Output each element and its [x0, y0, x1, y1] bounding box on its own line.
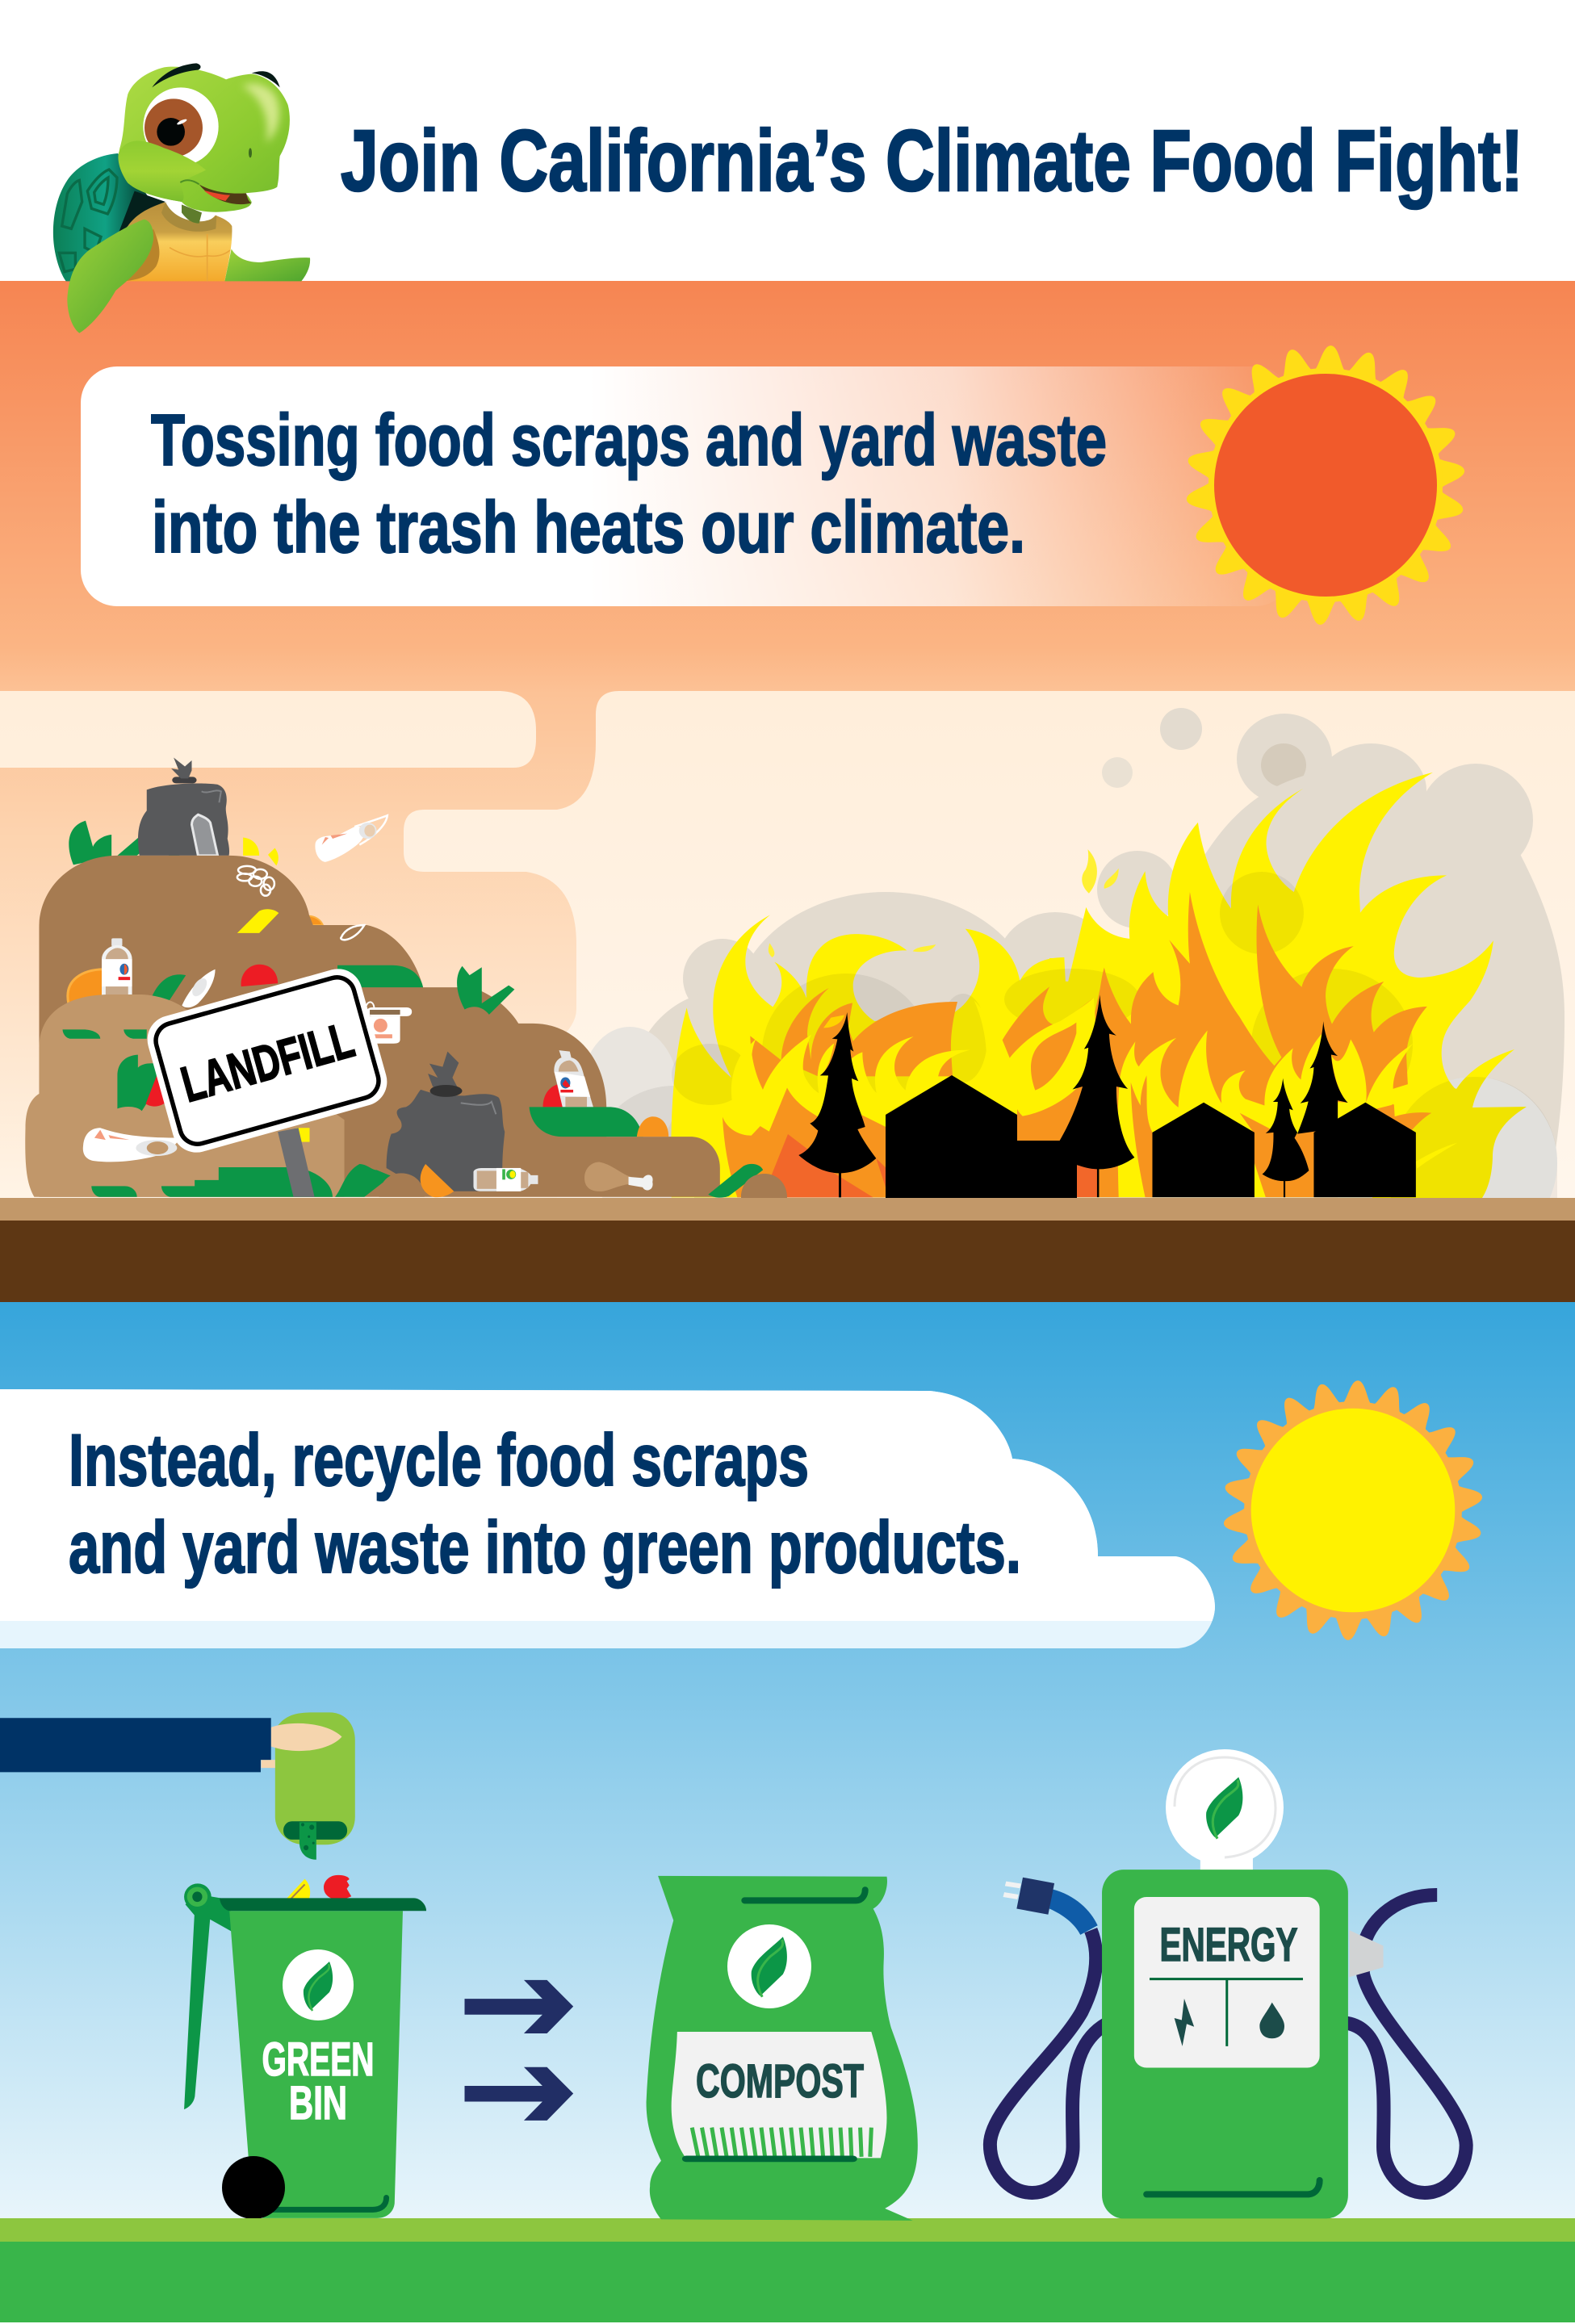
back leaves on landfill	[69, 821, 179, 865]
green leaf scrap	[151, 974, 186, 1001]
landfill sign	[142, 963, 392, 1158]
back yellow scraps	[243, 838, 279, 865]
orange fruit slice	[68, 969, 105, 1003]
takeout cup	[366, 1002, 412, 1044]
green bin	[184, 1875, 426, 2219]
cloud callout: recycle: Instead, recycle food scraps	[69, 1420, 809, 1501]
chicken drumstick	[584, 1162, 653, 1191]
bin wheel	[222, 2156, 285, 2219]
right edge tan mound	[741, 1174, 787, 1198]
flying food wrapper	[315, 815, 387, 862]
red apple in front hill	[146, 1074, 169, 1107]
front yellow flames	[723, 998, 1457, 1197]
plug	[1003, 1878, 1098, 1935]
white food wrapper	[83, 1128, 181, 1162]
plastic bottle left	[102, 938, 132, 995]
rear food scraps	[295, 916, 323, 925]
green bin: BIN	[289, 2077, 347, 2129]
lawn strip	[0, 2218, 1575, 2322]
red-orange flame base	[772, 1134, 1097, 1197]
tan mound	[379, 1173, 425, 1197]
red apple and bottle right	[543, 1050, 593, 1107]
landfill sign: LANDFILL	[175, 1012, 360, 1113]
bottom scraps at fire edge	[708, 1164, 763, 1198]
burning houses	[886, 1075, 1416, 1198]
hose holder	[1349, 1930, 1384, 1977]
callout: tossing food scraps: Tossing food scraps and yard waste	[151, 400, 1107, 481]
orange flame details	[1031, 1023, 1431, 1197]
trash bag lower	[387, 1052, 505, 1191]
icon: bright yellow sun	[1222, 1380, 1484, 1641]
compost bag	[647, 1876, 918, 2221]
green waste patch	[337, 965, 423, 987]
bin body	[229, 1911, 403, 2218]
clean sky panel background	[0, 1302, 1575, 2218]
hoses	[990, 1895, 1466, 2192]
red apple	[241, 965, 278, 986]
landfill mound with trash	[25, 758, 767, 1198]
bin label: GREEN	[262, 2033, 375, 2086]
sign post	[278, 1128, 315, 1197]
green waste ledge	[530, 1107, 643, 1137]
grapes	[237, 866, 274, 896]
trash bag on top	[138, 758, 229, 856]
orange wedge	[421, 1164, 454, 1197]
callout: tossing food scraps: into the trash heats our climate.	[152, 488, 1025, 568]
light front hill	[25, 995, 345, 1197]
orange half	[637, 1116, 668, 1137]
cream smoke-filled sky shapes	[0, 691, 1575, 1198]
cloud callout: recycle: and yard waste into green products.	[69, 1507, 1021, 1589]
vegetation tuft	[457, 966, 514, 1015]
pump top neck	[1200, 1854, 1253, 1871]
icon: hot orange sun	[1185, 345, 1466, 626]
back yellow flames	[671, 773, 1527, 1198]
orange flames	[723, 892, 1427, 1197]
burning pine trees	[798, 995, 1348, 1197]
turtle mascot	[53, 63, 310, 333]
bin leaf badge	[283, 1949, 354, 2020]
callout: tossing food scraps	[81, 366, 1292, 606]
bottle lying down	[473, 1168, 538, 1191]
compost leaf badge	[727, 1924, 811, 2008]
falling food scraps	[287, 1875, 351, 1900]
white header background	[0, 0, 1575, 281]
compost label: COMPOST	[696, 2055, 864, 2108]
yellow scrap	[237, 909, 279, 933]
bin lid arm	[184, 1894, 232, 2109]
translucent smoke over flames	[672, 872, 1557, 1198]
wildfire scene with smoke, flames, houses and trees	[581, 708, 1565, 1248]
pump top dial	[1166, 1749, 1284, 1865]
pump body	[1102, 1870, 1348, 2218]
front hill green patches	[63, 1029, 333, 1197]
pump panel	[1134, 1897, 1320, 2068]
hot sky panel background	[0, 281, 1575, 1198]
hand holding green compost bag	[0, 1712, 355, 1860]
icon: lightning bolt	[1175, 1999, 1194, 2046]
back smoke clouds	[581, 708, 1565, 1248]
energy pump	[990, 1749, 1466, 2218]
icon: fuel drop	[1259, 2003, 1284, 2038]
main dark hill	[39, 856, 720, 1197]
energy label: ENERGY	[1159, 1919, 1298, 1971]
small flame sparks	[769, 849, 1119, 957]
cloud callout: recycle	[0, 1389, 1215, 1648]
green leaf at hill base	[335, 1164, 392, 1197]
ground strip	[0, 1198, 1575, 1302]
arrows	[465, 1980, 573, 2121]
